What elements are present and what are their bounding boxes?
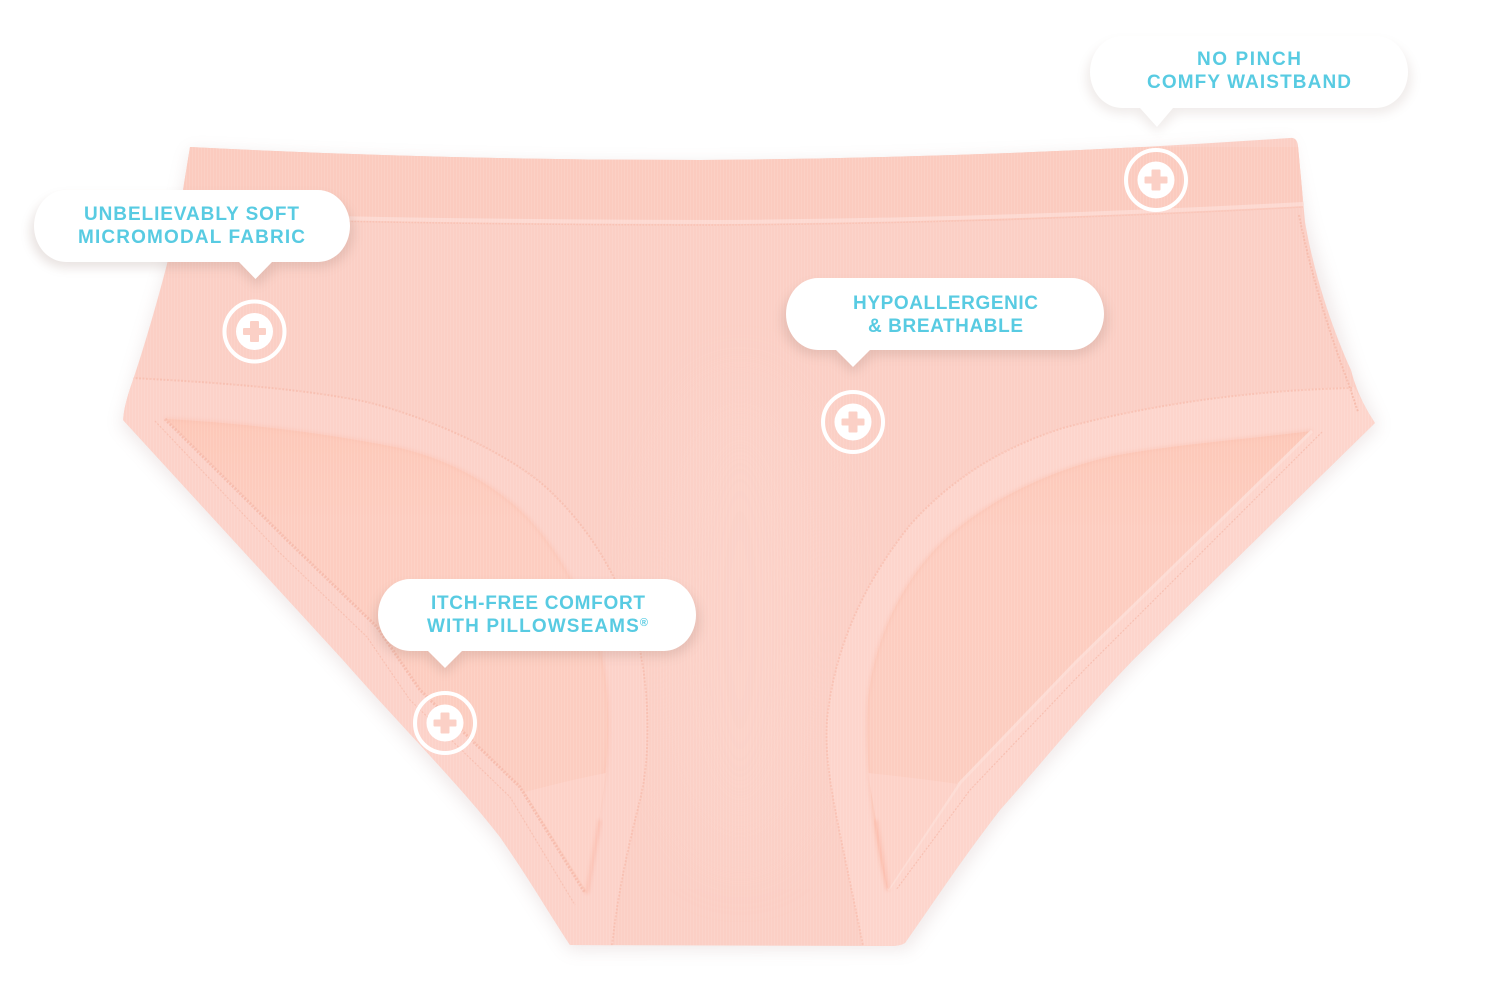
callout: no pinch comfy waistband: COMFY WAISTBAND: [1147, 72, 1351, 93]
bubble: [34, 190, 350, 279]
label text: ITCH-FREE COMFORT: [431, 593, 645, 614]
left band stitching: [132, 378, 648, 946]
right side seam: [1299, 215, 1358, 412]
left outer seam: [165, 419, 585, 893]
bubble shadow: [374, 585, 700, 674]
icon: plus marker waistband: [1126, 150, 1186, 210]
right leg opening back panel: [868, 432, 1309, 821]
callout: itch-free comfort with pillowseams: [374, 579, 700, 674]
waistband shading: [183, 147, 1304, 205]
icon: plus marker seam: [415, 693, 475, 753]
garment shadow: [120, 141, 1379, 951]
left back panel outline: [167, 418, 609, 773]
callout: itch-free comfort with pillowseams: ®: [640, 617, 648, 629]
right band stitching: [826, 388, 1352, 946]
label text: HYPOALLERGENIC: [853, 293, 1038, 314]
left gusset panel: [582, 774, 605, 888]
right outer stitching: [896, 432, 1322, 890]
right gusset panel: [868, 773, 958, 890]
callout: unbelievably soft micromodal fabric: MICROMODAL FABRIC: [78, 227, 305, 248]
label text: UNBELIEVABLY SOFT: [84, 204, 299, 225]
bubble: [378, 579, 696, 668]
right outer seam: [888, 431, 1312, 890]
bubble: [786, 278, 1104, 367]
garment: peach underwear: [100, 130, 1400, 960]
waistband stitched seam: [165, 204, 1303, 222]
icon: plus marker hypoallergenic: [823, 392, 883, 452]
callout: itch-free comfort with pillowseams: WITH PILLOWSEAMS: [427, 616, 639, 637]
gusset shadow right: [876, 820, 888, 890]
label text: NO PINCH: [1197, 49, 1301, 70]
right leg elastic band: [826, 387, 1375, 946]
bubble shadow: [782, 284, 1108, 373]
icon: plus marker fabric: [224, 302, 284, 362]
garment details: [100, 130, 1400, 960]
left leg elastic band: [124, 379, 570, 945]
left outer seam 2: [155, 421, 575, 905]
callout: hypoallergenic and breathable: & BREATHABLE: [868, 316, 1023, 337]
bubble shadow: [1086, 42, 1412, 132]
bubble: [1090, 36, 1408, 127]
callout: unbelievably soft micromodal fabric: [30, 190, 354, 286]
callout: hypoallergenic and breathable: [782, 278, 1108, 373]
bubble shadow: [30, 196, 354, 286]
gusset shadow left: [587, 820, 600, 893]
fabric rib texture: [100, 130, 1400, 960]
callout: no pinch comfy waistband: [1086, 36, 1412, 132]
garment silhouette: [123, 138, 1375, 946]
light patch centre: [650, 380, 830, 860]
left leg opening back panel: [165, 419, 608, 893]
right back panel outline: [867, 431, 1312, 890]
